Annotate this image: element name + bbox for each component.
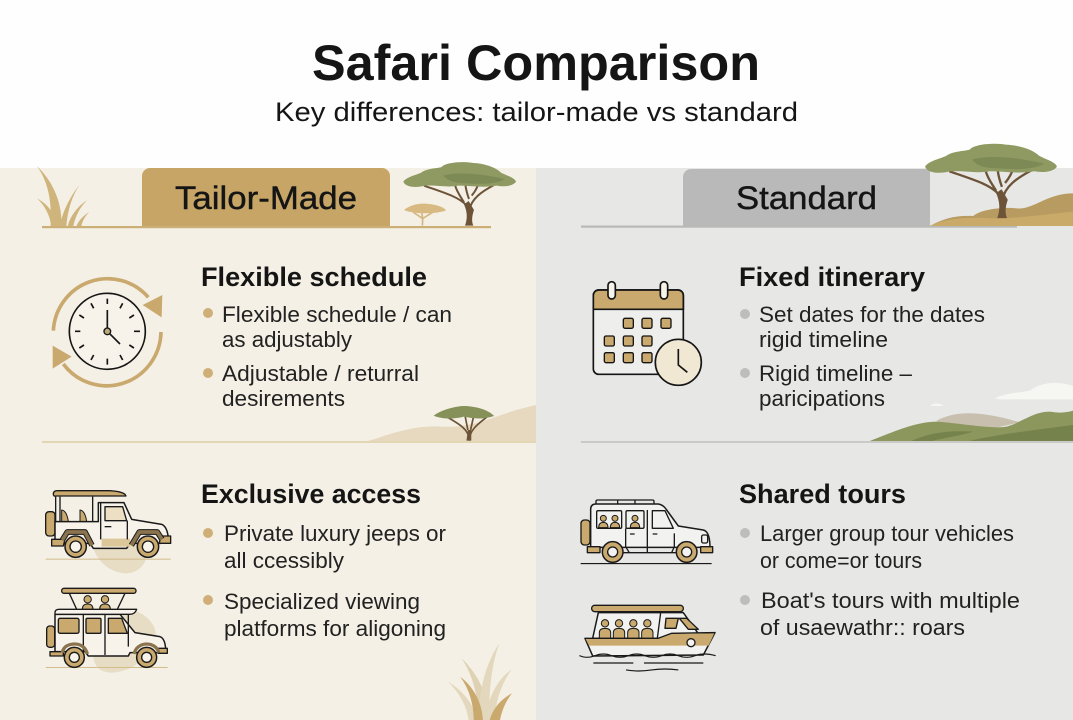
text block: flexible schedule: Flexible schedule / can: [222, 302, 452, 327]
text block: fixed itinerary: Fixed itinerary: [739, 262, 925, 292]
text block: exclusive access: Specialized viewing: [224, 589, 420, 614]
icon: viewing platform jeep: [46, 588, 168, 673]
tab: tailor-made: [142, 168, 390, 227]
text block: shared tours: [739, 479, 1020, 640]
scene: hill with acacia: [366, 405, 536, 442]
icon: grass tuft: [37, 166, 90, 226]
text block: fixed itinerary: Rigid timeline –: [759, 361, 912, 386]
panel: tailor-made: [0, 162, 536, 720]
text block: exclusive access: Exclusive access: [201, 479, 421, 509]
text block: shared tours: Larger group tour vehicles: [760, 521, 1014, 546]
text block: flexible schedule: Adjustable / returral: [222, 361, 419, 386]
text block: flexible schedule: [201, 262, 452, 411]
text block: exclusive access: platforms for aligoning: [224, 616, 446, 641]
text block: flexible schedule: desirements: [222, 386, 345, 411]
tab: standard: [683, 169, 930, 227]
text block: fixed itinerary: Set dates for the dates: [759, 302, 985, 327]
subtitle: Key differences: tailor-made vs standard: [275, 97, 798, 127]
text block: shared tours: Shared tours: [739, 479, 906, 509]
icon: tour van: [581, 500, 713, 564]
icon: acacia tree small: [404, 204, 446, 226]
icon: acacia tree right: [925, 144, 1057, 218]
title: Safari Comparison: [312, 35, 760, 91]
tab: standard: Standard: [736, 180, 877, 216]
text block: shared tours: Boat's tours with multiple: [761, 588, 1020, 613]
icon: clock with arrows: [53, 279, 162, 386]
text block: flexible schedule: Flexible schedule: [201, 262, 427, 292]
panel: standard: [536, 144, 1073, 720]
icon: open safari jeep: [46, 491, 171, 573]
scene: top right hills: [930, 193, 1073, 226]
icon: acacia tree large: [403, 162, 516, 226]
text block: fixed itinerary: paricipations: [759, 386, 885, 411]
text block: fixed itinerary: [739, 262, 985, 411]
text block: exclusive access: Private luxury jeeps or: [224, 521, 446, 546]
icon: tour boat: [579, 605, 716, 671]
text block: fixed itinerary: rigid timeline: [759, 327, 888, 352]
tab: tailor-made: Tailor-Made: [175, 180, 357, 216]
icon: bottom grass: [448, 643, 512, 720]
scene: hills and clouds: [868, 383, 1073, 442]
icon: calendar with clock: [593, 282, 701, 385]
text block: shared tours: or come=or tours: [760, 548, 922, 573]
text block: exclusive access: [201, 479, 446, 641]
text block: shared tours: of usaewathr:: roars: [760, 615, 965, 640]
text block: exclusive access: all ccessibly: [224, 548, 345, 573]
text block: flexible schedule: as adjustably: [222, 327, 353, 352]
